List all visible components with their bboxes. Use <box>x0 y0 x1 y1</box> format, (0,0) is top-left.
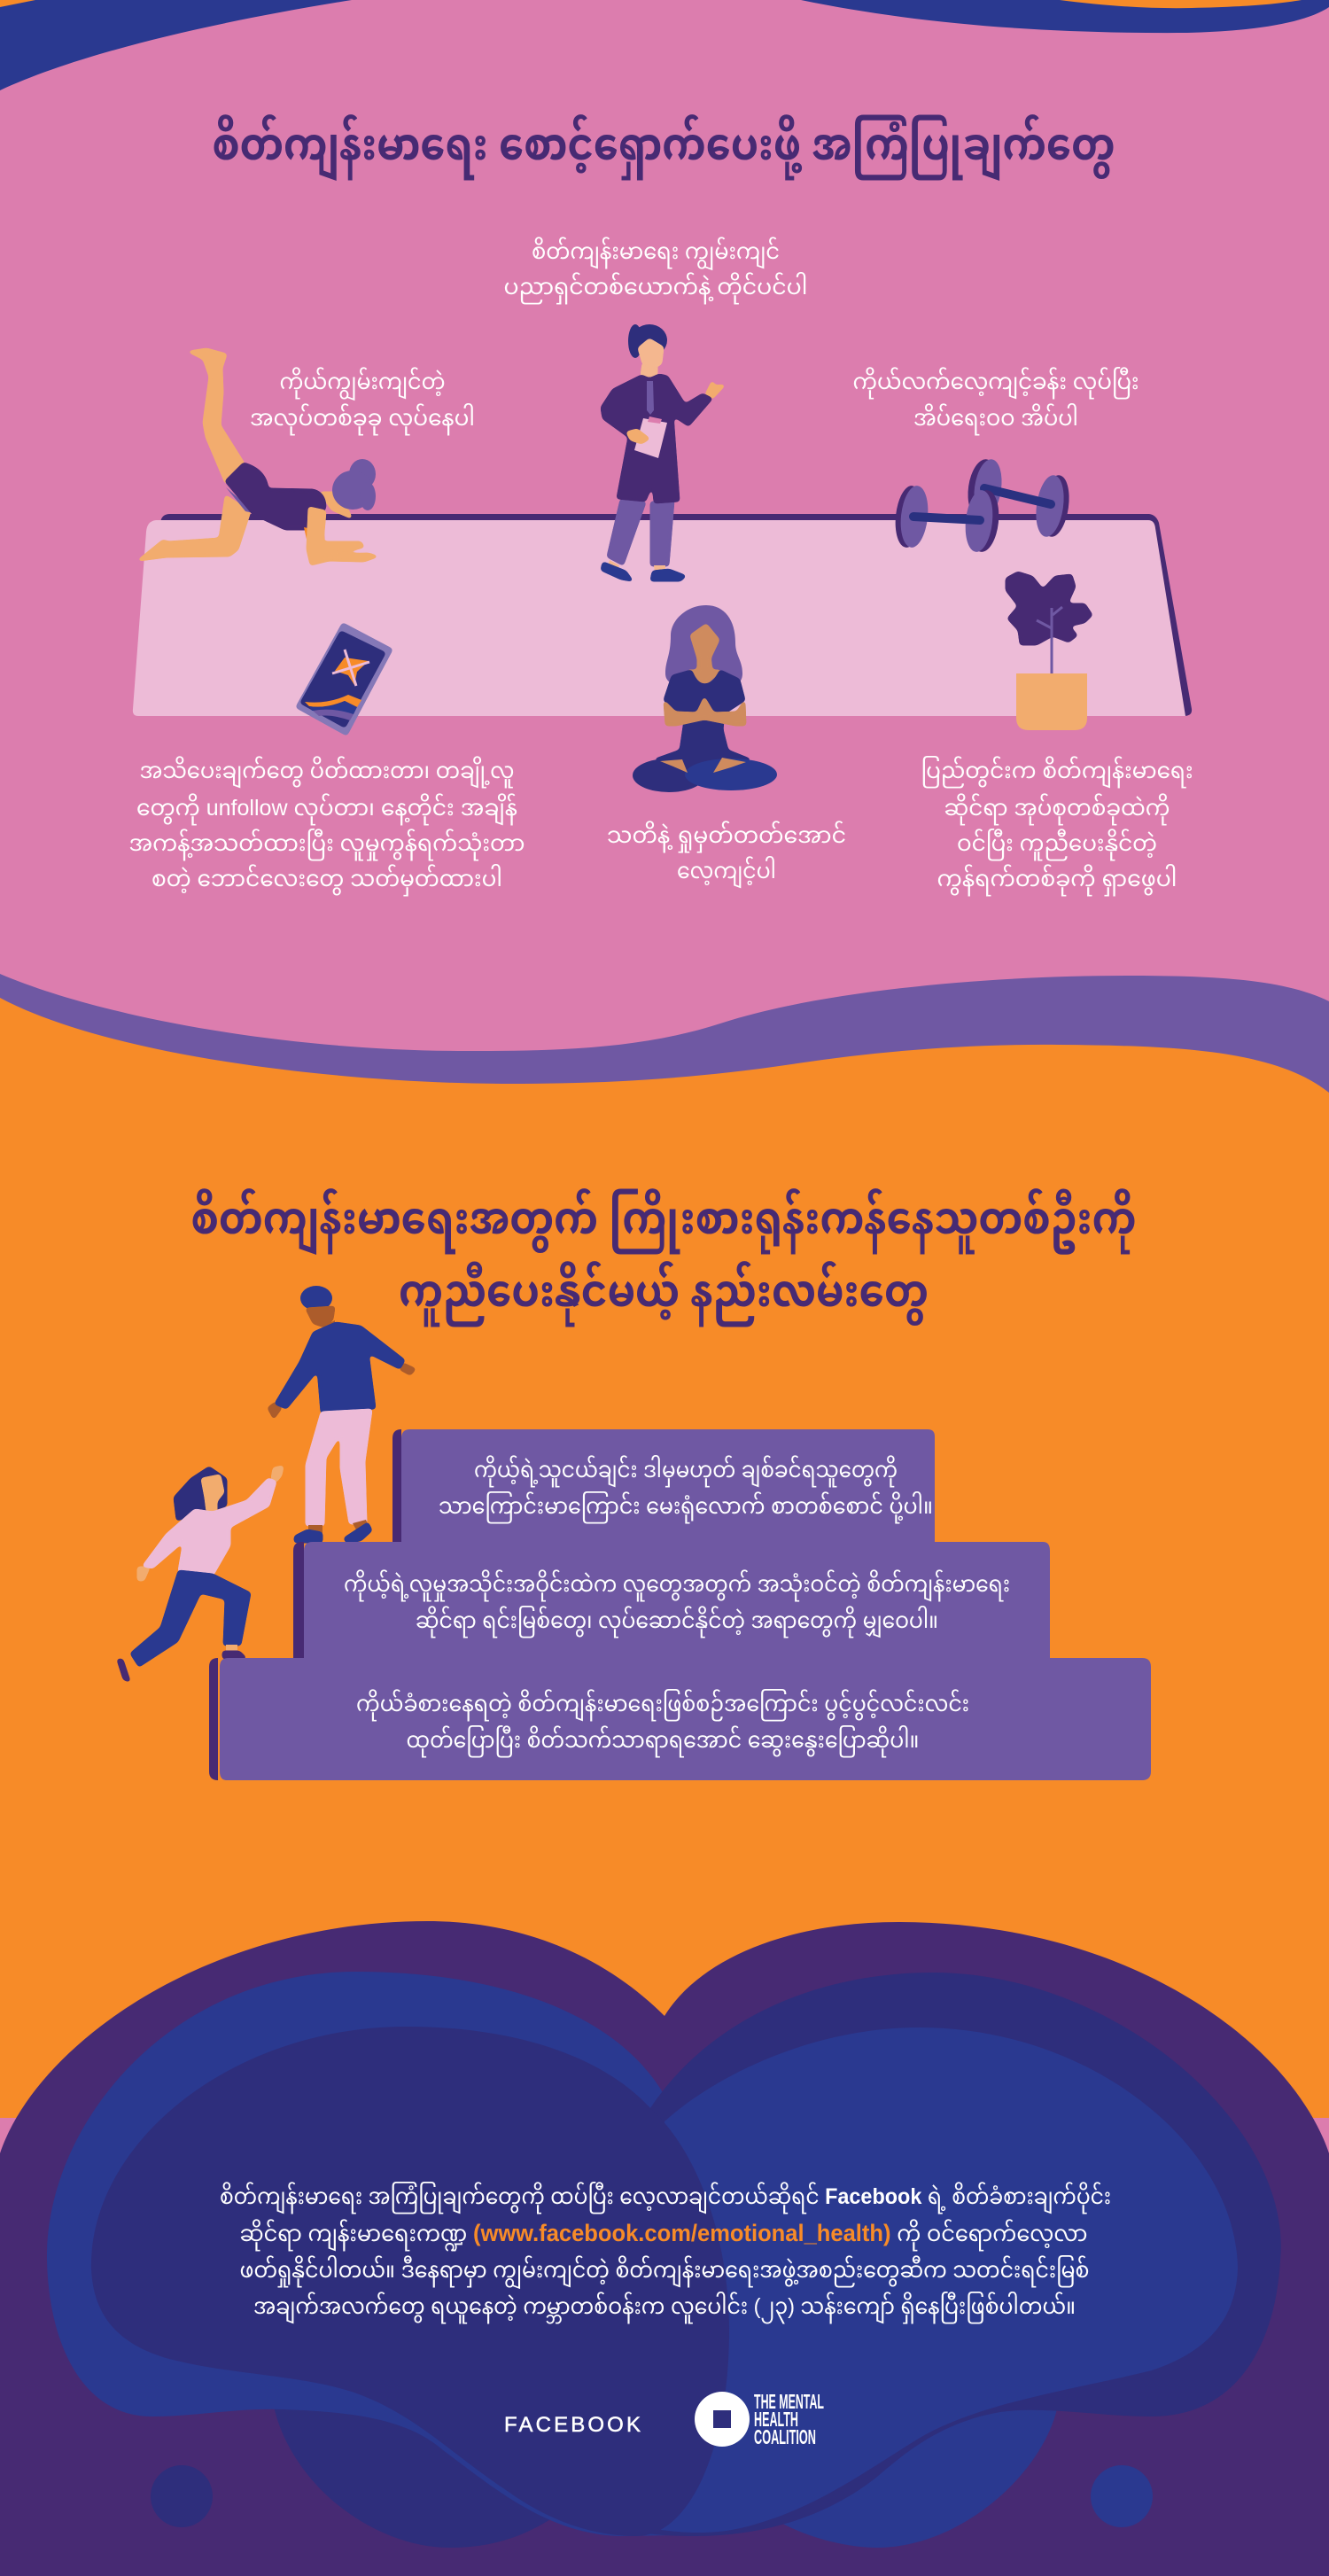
text block: consult a professional <box>503 236 808 305</box>
text block: find a local support group <box>921 755 1193 897</box>
panel: dark purple heart <box>0 1921 1329 2576</box>
panel: purple divider wave <box>0 974 1329 1152</box>
logo: The Mental Health Coalition: THE MENTAL <box>754 2390 824 2413</box>
decoration: right small dot <box>1091 2465 1153 2527</box>
logo: The Mental Health Coalition <box>695 2390 824 2448</box>
text block: practice mindfulness: လေ့ကျင့်ပါ <box>677 855 776 889</box>
panel: top navy wave <box>0 0 1329 90</box>
step 2 middle <box>293 1542 1050 1658</box>
text block: limit social media: စတဲ့ ဘောင်လေးတွေ သတ်မှတ်ထားပါ <box>152 863 502 897</box>
step 2 middle: ကိုယ့်ရဲ့လူမှုအသိုင်းအဝိုင်းထဲက လူတွေအတွက် အသုံးဝင်တဲ့ စိတ်ကျန်းမာရေး <box>344 1568 1010 1602</box>
illustration: potted plant <box>1006 572 1092 730</box>
text block: limit social media: အသိပေးချက်တွေ ပိတ်ထားတာ၊ တချို့လူ <box>140 755 514 789</box>
step 3 bottom: ထုတ်ပြောပြီး စိတ်သက်သာရာရအောင် ဆွေးနွေးပြောဆိုပါ။ <box>406 1724 920 1758</box>
decoration: left inner lobe <box>91 2027 729 2536</box>
illustration: dumbbells <box>892 457 1073 553</box>
logo: The Mental Health Coalition: HEALTH <box>754 2408 798 2431</box>
decoration: left blue lobe <box>47 1972 729 2536</box>
step 1 top <box>392 1429 935 1542</box>
panel: orange section background <box>0 998 1329 2118</box>
step 1 top: သာကြောင်းမာကြောင်း မေးရုံလောက် စာတစ်စောင် ပို့ပါ။ <box>439 1490 933 1524</box>
text block: find a local support group: ပြည်တွင်းက စိတ်ကျန်းမာရေး <box>921 755 1193 789</box>
text block: find a local support group: ကွန်ရက်တစ်ခုကို ရှာဖွေပါ <box>937 863 1177 897</box>
logo: The Mental Health Coalition: COALITION <box>754 2425 816 2448</box>
step 1 top: ကိုယ့်ရဲ့သူငယ်ချင်း ဒါမှမဟုတ် ချစ်ခင်ရသူတွေကို <box>474 1454 898 1488</box>
decoration: right dark lobe <box>620 1973 1281 2536</box>
text block: closing paragraph: ဖတ်ရှုနိုင်ပါတယ်။ ဒီနေရာမှာ ကျွမ်းကျင်တဲ့ စိတ်ကျန်းမာရေးအဖွဲ့အစည်းတွေဆီက သတင်းရင်းမြစ် <box>239 2254 1090 2290</box>
illustration: meditating woman <box>633 605 777 792</box>
heading: helping someone title: ကူညီပေးနိုင်မယ့် နည်းလမ်းတွေ <box>399 1261 929 1327</box>
decoration: lower right bulge <box>771 2393 1060 2548</box>
text block: closing paragraph: ဆိုင်ရာ ကျန်းမာရေးကဏ္ဍ (www.facebook.com/emotional_health) ကို ဝင်ရောက်လေ့လာ <box>239 2218 1088 2253</box>
illustration: phone with unfollow icon <box>297 624 392 735</box>
heading: tips title: စိတ်ကျန်းမာရေး စောင့်ရှောက်ပေးဖို့ အကြံပြုချက်တွေ <box>213 114 1115 181</box>
text block: consult a professional: စိတ်ကျန်းမာရေး ကျွမ်းကျင် <box>532 236 780 271</box>
illustration: exercise mat <box>133 514 1192 716</box>
text block: practice mindfulness: သတိနဲ့ ရှုမှတ်တတ်အောင် <box>607 820 846 853</box>
text block: closing paragraph: စိတ်ကျန်းမာရေး အကြံပြုချက်တွေကို ထပ်ပြီး လေ့လာချင်တယ်ဆိုရင် Facebook ရဲ့ စိတ်ခံစားချက်ပိုင်း <box>220 2181 1111 2214</box>
step 3 bottom <box>209 1658 1151 1780</box>
text block: do something you are good at <box>250 366 475 436</box>
logo: Facebook wordmark: FACEBOOK <box>504 2413 641 2437</box>
illustration: woman climbing <box>118 1467 283 1681</box>
panel: pink background <box>0 0 1329 1099</box>
illustration: man on steps <box>268 1286 415 1542</box>
text block: practice mindfulness <box>607 820 846 889</box>
chart: staircase of three steps <box>209 1429 1151 1780</box>
illustration: doctor with clipboard <box>602 324 724 580</box>
text block: limit social media <box>129 755 525 897</box>
text block: exercise and sleep <box>852 366 1139 436</box>
decoration: right inner lobe <box>661 2027 1238 2533</box>
text block: find a local support group: ဝင်ပြီး ကူညီပေးနိုင်တဲ့ <box>957 828 1157 861</box>
text block: exercise and sleep: ကိုယ်လက်လေ့ကျင့်ခန်း လုပ်ပြီး <box>852 366 1139 400</box>
text block: exercise and sleep: အိပ်ရေးဝဝ အိပ်ပါ <box>913 402 1078 436</box>
illustration: yoga woman <box>139 349 377 564</box>
heading: helping someone title <box>191 1188 1136 1327</box>
text block: limit social media: တွေကို unfollow လုပ်တာ၊ နေ့တိုင်း အချိန် <box>136 792 517 826</box>
text block: do something you are good at: အလုပ်တစ်ခုခု လုပ်နေပါ <box>250 402 475 436</box>
step 2 middle: ဆိုင်ရာ ရင်းမြစ်တွေ၊ လုပ်ဆောင်နိုင်တဲ့ အရာတွေကို မျှဝေပါ။ <box>416 1605 938 1638</box>
text block: find a local support group: ဆိုင်ရာ အုပ်စုတစ်ခုထဲကို <box>944 792 1170 826</box>
decoration: left small dot <box>151 2465 213 2527</box>
step 3 bottom: ကိုယ်ခံစားနေရတဲ့ စိတ်ကျန်းမာရေးဖြစ်စဉ်အကြောင်း ပွင့်ပွင့်လင်းလင်း <box>356 1688 969 1722</box>
text block: closing paragraph <box>220 2181 1111 2324</box>
panel: bottom pink strip <box>0 2118 1329 2171</box>
decoration: lower left bulge <box>271 2393 567 2548</box>
text block: consult a professional: ပညာရှင်တစ်ယောက်နဲ့ တိုင်ပင်ပါ <box>503 271 808 305</box>
text block: limit social media: အကန့်အသတ်ထားပြီး လူမှုကွန်ရက်သုံးတာ <box>129 828 525 861</box>
heading: helping someone title: စိတ်ကျန်းမာရေးအတွက် ကြိုးစားရုန်းကန်နေသူတစ်ဦးကို <box>191 1188 1136 1255</box>
text block: do something you are good at: ကိုယ်ကျွမ်းကျင်တဲ့ <box>280 366 445 401</box>
text block: closing paragraph: အချက်အလက်တွေ ရယူနေတဲ့ ကမ္ဘာတစ်ဝန်းက လူပေါင်း (၂၃) သန်းကျော် ရှိနေပြီးဖြစ်ပါတယ်။ <box>253 2291 1076 2324</box>
